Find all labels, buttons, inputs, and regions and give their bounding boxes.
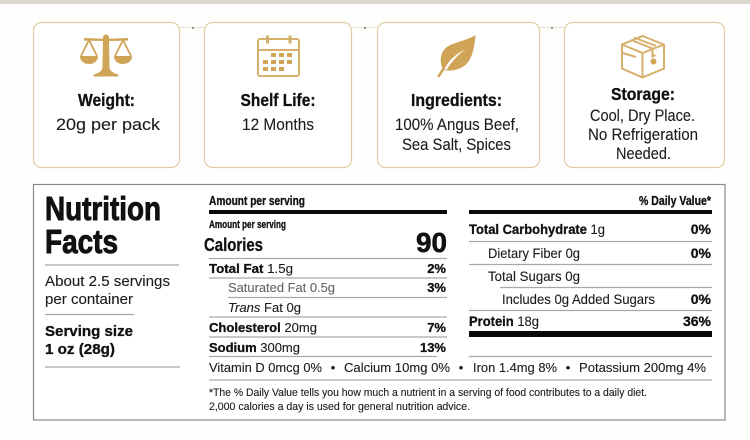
row: dietary fiber: Dietary Fiber 0g: [488, 245, 580, 261]
row: total fat: Total Fat 1.5g: [209, 261, 293, 276]
text: footnote: 2,000 calories a day is used for general nutrition advice.: [209, 401, 470, 413]
row: trans fat: Trans Fat 0g: [228, 300, 301, 315]
text: storage value: [588, 106, 698, 163]
row: vitamins and minerals: •: [566, 360, 571, 375]
row: vitamins and minerals: Iron 1.4mg 8%: [473, 360, 557, 375]
panel: weight: [34, 22, 180, 168]
row: calories: Calories: [204, 235, 263, 255]
row: calories: 90: [416, 227, 447, 258]
text: serving size: 1 oz (28g): [45, 341, 115, 358]
row: saturated fat: 3%: [427, 280, 446, 295]
text: storage value: Cool, Dry Place.: [590, 106, 695, 125]
panel: storage: [564, 22, 724, 168]
icon: calendar: [258, 36, 299, 76]
row: dietary fiber: 0%: [691, 245, 712, 261]
text: serving size: Serving size: [45, 323, 133, 340]
row: total carbohydrate: [469, 221, 712, 237]
table: left nutrient column: Amount per serving: [209, 219, 286, 231]
text: servings per container: About 2.5 servings: [45, 273, 170, 290]
table: right nutrient column: [469, 194, 712, 356]
text: weight value: 20g per pack: [56, 115, 161, 134]
row: saturated fat: Saturated Fat 0.5g: [228, 280, 335, 295]
heading: storage: Storage:: [611, 84, 675, 104]
row: cholesterol: [209, 320, 446, 335]
row: cholesterol: Cholesterol 20mg: [209, 320, 317, 335]
row: total carbohydrate: Total Carbohydrate 1g: [469, 221, 605, 237]
icon: leaf: [437, 35, 476, 78]
row: calories: [204, 227, 447, 258]
panel: ingredients: [378, 22, 540, 168]
text: footnote: [209, 387, 647, 413]
row: vitamins and minerals: [209, 360, 706, 375]
heading: nutrition facts: [45, 190, 161, 260]
text: footnote: *The % Daily Value tells you how much a nutrient in a serving of food contributes to a daily diet.: [209, 387, 647, 399]
text: ingredients value: Sea Salt, Spices: [402, 135, 511, 154]
row: total sugars: Total Sugars 0g: [488, 268, 580, 284]
text: servings per container: [45, 273, 170, 308]
row: saturated fat: [228, 280, 446, 295]
row: vitamins and minerals: •: [331, 360, 336, 375]
row: vitamins and minerals: Vitamin D 0mcg 0%: [209, 360, 322, 375]
row: dietary fiber: [488, 245, 712, 261]
table: right nutrient column: % Daily Value*: [639, 194, 711, 208]
row: vitamins and minerals: Calcium 10mg 0%: [344, 360, 450, 375]
row: protein: [469, 313, 712, 329]
icon: balance scale: [80, 34, 132, 76]
row: vitamins and minerals: Potassium 200mg 4%: [579, 360, 706, 375]
row: sodium: Sodium 300mg: [209, 340, 300, 355]
table: left nutrient column: [204, 194, 447, 356]
panel: shelf life: [204, 22, 352, 168]
heading: nutrition facts: Nutrition: [45, 190, 161, 227]
text: serving size: [45, 323, 133, 358]
row: protein: Protein 18g: [469, 313, 539, 329]
row: total fat: [209, 261, 446, 276]
text: storage value: No Refrigeration: [588, 125, 698, 144]
row: protein: 36%: [683, 313, 712, 329]
text: ingredients value: 100% Angus Beef,: [395, 115, 519, 134]
text: shelf life value: 12 Months: [242, 115, 314, 134]
table: left nutrient column: Amount per serving: [209, 194, 305, 208]
panel: nutrition facts: [34, 184, 725, 420]
icon: box: [622, 36, 664, 78]
row: vitamins and minerals: •: [459, 360, 464, 375]
row: cholesterol: 7%: [427, 320, 446, 335]
row: sodium: [209, 340, 446, 355]
text: ingredients value: [395, 115, 519, 154]
heading: nutrition facts: Facts: [45, 223, 118, 260]
text: servings per container: per container: [45, 291, 133, 308]
row: sodium: 13%: [420, 340, 446, 355]
heading: shelf life: Shelf Life:: [240, 90, 316, 110]
row: added sugars: Includes 0g Added Sugars: [502, 291, 655, 307]
row: added sugars: 0%: [691, 291, 712, 307]
heading: weight: Weight:: [78, 90, 135, 110]
text: storage value: Needed.: [616, 144, 671, 163]
row: total fat: 2%: [427, 261, 446, 276]
heading: ingredients: Ingredients:: [411, 90, 502, 110]
row: total carbohydrate: 0%: [691, 221, 712, 237]
